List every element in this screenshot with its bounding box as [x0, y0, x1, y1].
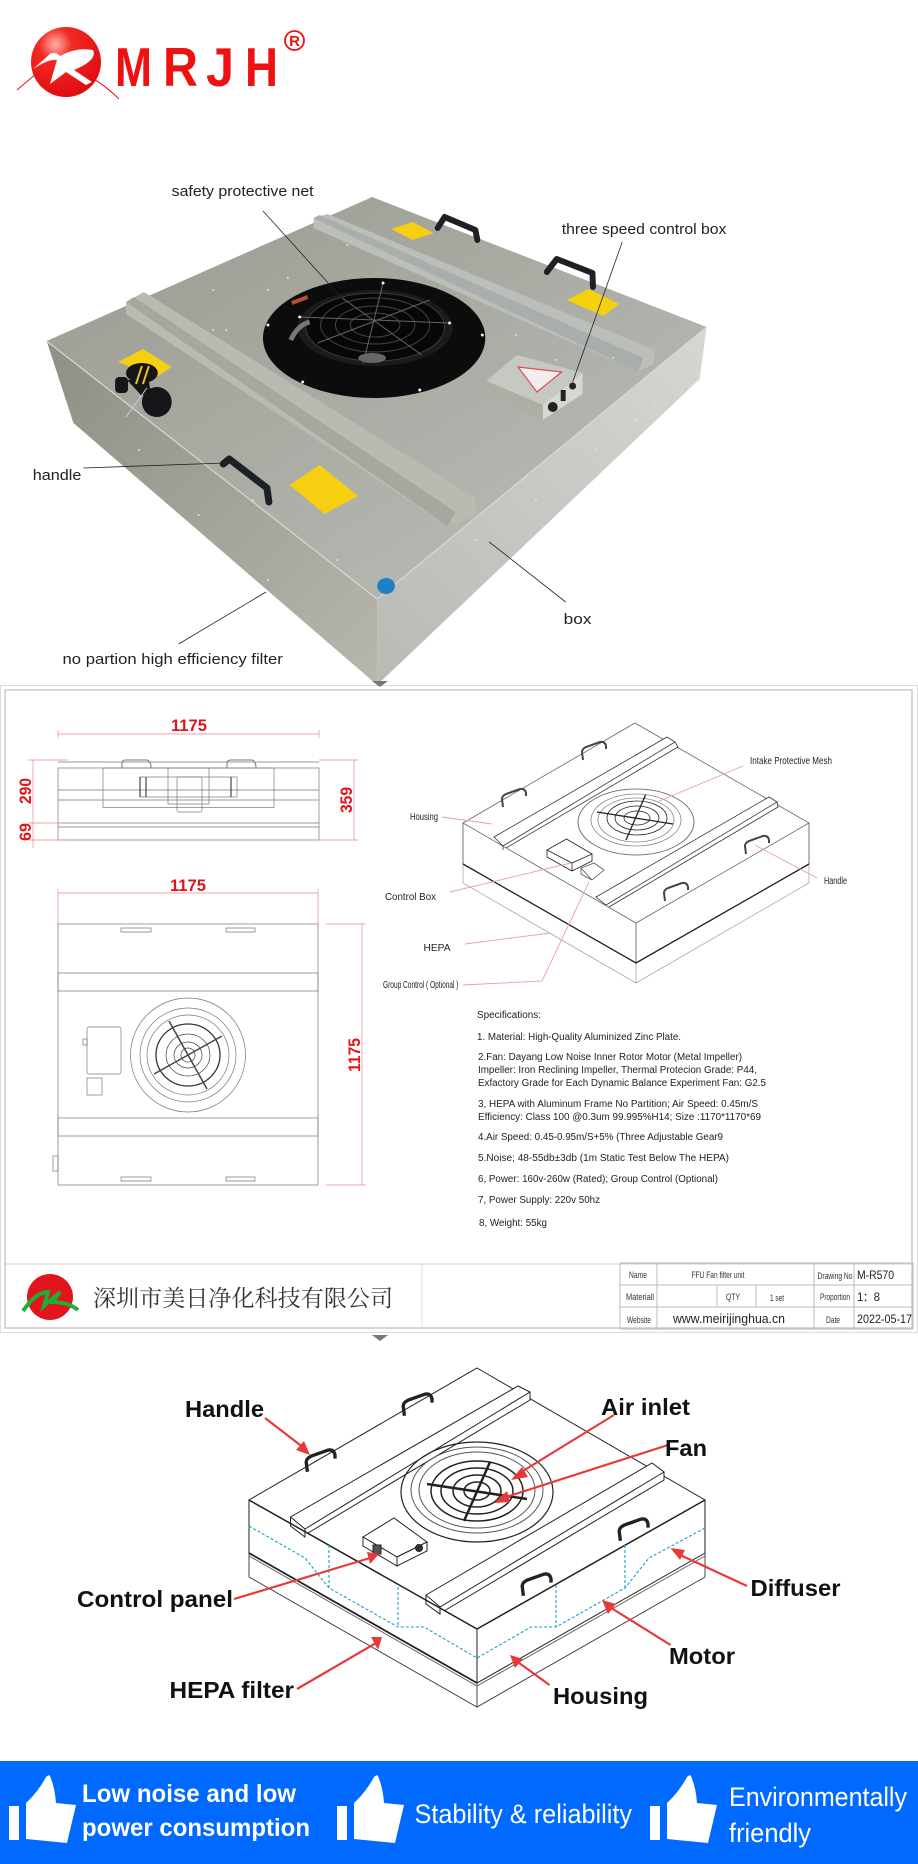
title block table: Materiall	[626, 1292, 654, 1303]
specifications text: Efficiency: Class 100 @0.3um 99.995%H14; Size :1170*1170*69	[478, 1112, 761, 1123]
callout labels	[77, 1394, 840, 1709]
title block table: QTY	[726, 1292, 740, 1303]
title block table: 2022-05-17	[857, 1314, 912, 1326]
rivet dots	[138, 244, 656, 581]
benefit 2: stability	[337, 1775, 632, 1843]
drawing labels	[383, 756, 847, 991]
company name: 深圳市美日净化科技有限公司	[93, 1280, 393, 1313]
callout labels: Diffuser	[750, 1575, 840, 1601]
callout labels: Air inlet	[601, 1394, 690, 1420]
callout: three speed control box: three speed control box	[562, 221, 727, 238]
title block table: Drawing No	[818, 1271, 852, 1282]
text: low noise: power consumption	[82, 1814, 310, 1842]
title block table: www.meirijinghua.cn	[672, 1312, 785, 1326]
drawing labels: Group Control ( Optional )	[383, 980, 458, 991]
callout: safety protective net: safety protective net	[172, 183, 314, 200]
title block table: Proportion	[820, 1292, 850, 1303]
control panel box	[363, 1518, 427, 1566]
company logo and name	[23, 1274, 393, 1320]
icon: thumbs up	[650, 1775, 717, 1843]
callout labels: Housing	[553, 1683, 648, 1709]
control box	[483, 355, 583, 420]
title block table: 1：8	[857, 1292, 880, 1304]
icon: thumbs up	[337, 1775, 404, 1843]
leader lines	[83, 211, 622, 644]
banner: product benefits	[0, 1761, 918, 1864]
marker triangles	[372, 681, 388, 1341]
callout: handle: handle	[33, 467, 81, 484]
blue dashed air path	[249, 1526, 705, 1658]
title block table	[620, 1263, 913, 1329]
title block table: Website	[627, 1315, 651, 1326]
dimension values: 1175	[345, 1038, 364, 1072]
specifications text: 7, Power Supply: 220v 50hz	[478, 1195, 600, 1206]
brand name	[115, 36, 278, 98]
registered mark: R	[289, 33, 300, 50]
specifications text: 5.Noise; 48-55db±3db (1m Static Test Below The HEPA)	[478, 1153, 729, 1164]
panel: technical drawing sheet	[0, 681, 918, 1341]
fan with black bell mouth	[263, 278, 485, 398]
title block table: 1 set	[770, 1293, 784, 1304]
callout labels: HEPA filter	[170, 1677, 294, 1703]
dimension values: 1175	[171, 716, 207, 735]
pink leader lines	[442, 766, 817, 985]
specifications text: 6, Power: 160v-260w (Rated); Group Control (Optional)	[478, 1174, 718, 1185]
drawing labels: Control Box	[385, 891, 437, 903]
specifications text: 8, Weight: 55kg	[479, 1218, 547, 1229]
title block table: Name	[629, 1270, 647, 1281]
dimension lines	[28, 730, 366, 1185]
drawing labels: Housing	[410, 812, 438, 823]
callout labels: Fan	[665, 1435, 707, 1461]
title block table: Date	[826, 1315, 840, 1326]
brand name: R	[163, 36, 198, 98]
callout: box: box	[564, 611, 592, 628]
text: low noise	[82, 1780, 310, 1842]
brand name: J	[206, 36, 234, 98]
callout labels: Handle	[185, 1396, 264, 1422]
specifications text: Exfactory Grade for Each Dynamic Balance Experiment Fan: G2.5	[478, 1078, 766, 1089]
unit outline	[249, 1368, 705, 1707]
blue sticker	[377, 578, 395, 594]
brand name: H	[245, 36, 278, 98]
icon: company logo	[23, 1274, 78, 1320]
title block table: FFU Fan filter unit	[692, 1270, 745, 1281]
specifications text: 1. Material: High-Quality Aluminized Zinc Plate.	[477, 1032, 681, 1043]
isometric line drawing	[463, 723, 809, 983]
registered mark	[285, 31, 304, 50]
dimension values: 69	[16, 823, 35, 841]
specifications text: Impeller: Iron Reclining Impeller, Thermal Protecion Grade: P44,	[478, 1065, 757, 1076]
text: environment	[729, 1782, 907, 1848]
drawing labels: Intake Protective Mesh	[750, 756, 832, 767]
arrow heads	[296, 1441, 685, 1668]
icon: red ball logo	[17, 27, 119, 99]
dimension values: 290	[16, 778, 35, 804]
handles	[306, 1394, 648, 1596]
drawing labels: Handle	[824, 876, 847, 887]
callout labels: Control panel	[77, 1586, 233, 1612]
benefit 3: environment	[650, 1775, 907, 1848]
unit body faces	[47, 197, 707, 685]
dimension values	[16, 716, 364, 1072]
title block table: M-R570	[857, 1270, 894, 1282]
benefit 1: low noise	[9, 1775, 310, 1843]
side view drawing	[58, 760, 319, 840]
callout labels: Motor	[669, 1643, 735, 1669]
specifications text: Specifications:	[477, 1010, 541, 1021]
panel: labelled structure diagram	[77, 1368, 840, 1709]
top view drawing	[53, 924, 318, 1185]
brand name: M	[115, 36, 152, 98]
drawing frame	[0, 686, 918, 1332]
specifications text: 4.Air Speed: 0.45-0.95m/S+5% (Three Adjustable Gear9	[478, 1132, 723, 1143]
dimension values: 1175	[170, 876, 206, 895]
specifications text: 3, HEPA with Aluminum Frame No Partition; Air Speed: 0.45m/S	[478, 1099, 758, 1110]
icon: thumbs up	[9, 1775, 76, 1843]
text: low noise: Low noise and low	[82, 1780, 297, 1808]
mounting rails	[126, 214, 655, 526]
specifications text: 2.Fan: Dayang Low Noise Inner Rotor Motor (Metal Impeller)	[478, 1052, 742, 1063]
text: environment: friendly	[729, 1818, 811, 1848]
warning labels	[118, 222, 619, 514]
handles and power cable	[223, 217, 593, 502]
drawing labels: HEPA	[424, 942, 450, 954]
specifications text	[477, 1010, 766, 1229]
banner background	[0, 1761, 918, 1864]
panel: product photo	[33, 183, 727, 685]
text: stability: Stability & reliability	[414, 1799, 632, 1829]
dimension values: 359	[337, 787, 356, 813]
logo: MRJH	[17, 27, 304, 99]
red arrows	[234, 1415, 747, 1689]
fan and grille	[401, 1442, 553, 1542]
callout: filter: no partion high efficiency filter	[63, 651, 283, 668]
text: environment: Environmentally	[729, 1782, 907, 1812]
power cable bundle	[115, 363, 172, 417]
